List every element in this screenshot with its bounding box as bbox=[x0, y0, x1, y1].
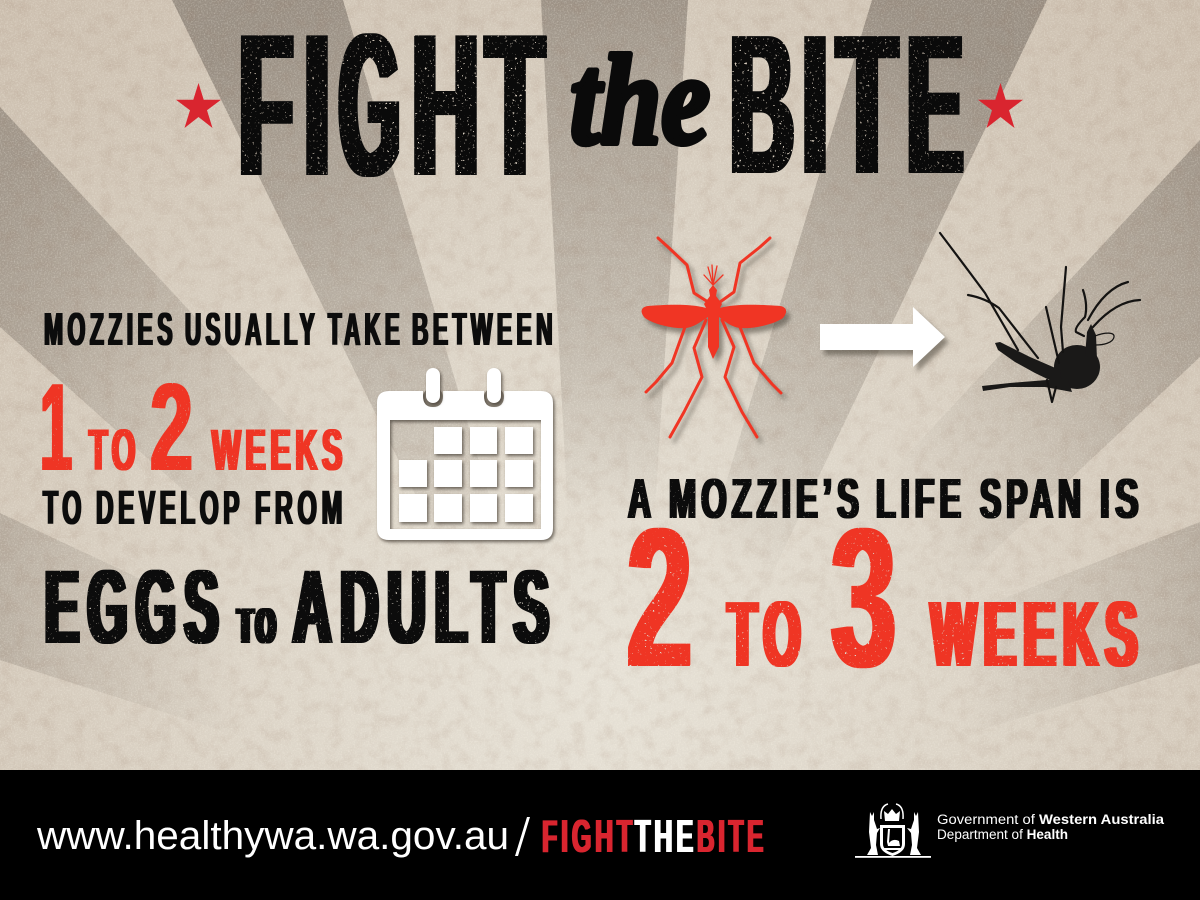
icon: dead black mosquito bbox=[940, 233, 1140, 402]
text: a mozzie's life span is: A bbox=[628, 467, 656, 531]
icon: live red mosquito bbox=[642, 238, 786, 437]
title word: FIGHT bbox=[239, 0, 544, 219]
footer website address: www.healthywa.wa.gov.au bbox=[36, 814, 509, 858]
text: eggs to adults: TO bbox=[238, 598, 279, 654]
text: a mozzie's life span is: SPAN bbox=[980, 467, 1086, 531]
footer campaign name: THE bbox=[635, 810, 697, 862]
calendar frame bbox=[377, 391, 553, 540]
calendar day squares bbox=[399, 427, 533, 522]
title word: BITE bbox=[730, 0, 963, 216]
crest left kangaroo bbox=[867, 812, 880, 855]
footer campaign name: FIGHT bbox=[542, 810, 636, 862]
text: eggs to adults: EGGS bbox=[45, 549, 227, 666]
calendar rings backing bbox=[423, 388, 504, 408]
text: BETWEEN bbox=[412, 303, 557, 355]
text: mozzies usually take between: TAKE bbox=[328, 303, 404, 355]
text: 1 to 2 weeks bbox=[40, 359, 347, 497]
text: mozzies usually take between: MOZZIES bbox=[44, 303, 177, 355]
footer campaign name: BITE bbox=[697, 810, 767, 862]
text: 2 to 3 weeks: 3 bbox=[831, 487, 896, 708]
icon: right red star bbox=[978, 83, 1023, 128]
text: to develop from: FROM bbox=[255, 482, 347, 535]
text: 1 to 2 weeks: TO bbox=[89, 418, 140, 483]
icon: Western Australia coat of arms bbox=[855, 804, 931, 858]
dead mosquito legs and antennae bbox=[940, 233, 1140, 402]
footer government text: Government of Western Australia bbox=[937, 812, 1165, 827]
footer government text bbox=[937, 812, 1165, 842]
text: E bbox=[907, 0, 963, 216]
icon: left red star bbox=[176, 83, 221, 128]
title word: the: the bbox=[570, 29, 710, 171]
text: a mozzie's life span is: LIFE bbox=[876, 467, 966, 531]
title word: BITE: B bbox=[730, 0, 794, 216]
text: to develop from: TO bbox=[43, 482, 86, 535]
text: 2 to 3 weeks: TO bbox=[728, 582, 808, 686]
dead mosquito body bbox=[982, 324, 1100, 392]
calendar rings bbox=[426, 368, 501, 403]
text: 2 to 3 weeks bbox=[627, 487, 1145, 708]
footer government text: Department of Health bbox=[937, 827, 1068, 842]
icon: calendar bbox=[377, 368, 553, 540]
text: eggs to adults: ADULTS bbox=[293, 549, 558, 666]
text: a mozzie's life span is bbox=[628, 467, 1144, 531]
crest shield bbox=[880, 825, 905, 856]
text: 1 to 2 weeks: 1 bbox=[40, 359, 72, 497]
crest crown bbox=[884, 809, 900, 821]
crest base bbox=[855, 856, 931, 858]
text: to develop from: DEVELOP bbox=[96, 482, 244, 535]
text: mozzies usually take between: USUALLY bbox=[185, 303, 319, 355]
title word: BITE: T bbox=[837, 0, 897, 216]
title: Fight the Bite bbox=[239, 0, 963, 219]
mosquito wings and body bbox=[642, 285, 786, 359]
text: 1 to 2 weeks: 2 bbox=[150, 359, 193, 497]
footer slash bbox=[515, 817, 530, 856]
crest swan bbox=[887, 829, 900, 846]
crest right kangaroo bbox=[907, 812, 921, 855]
text: 2 to 3 weeks: 2 bbox=[627, 487, 692, 708]
text: mozzies usually take between bbox=[44, 303, 557, 355]
text: a mozzie's life span is: IS bbox=[1100, 467, 1144, 531]
text: a mozzie's life span is: MOZZIE’S bbox=[669, 467, 864, 531]
title word: BITE: I bbox=[802, 0, 828, 216]
mosquito legs and antennae bbox=[646, 238, 781, 437]
text: 1 to 2 weeks: WEEKS bbox=[212, 418, 347, 483]
arrow bbox=[820, 307, 945, 367]
footer band bbox=[0, 771, 1200, 900]
